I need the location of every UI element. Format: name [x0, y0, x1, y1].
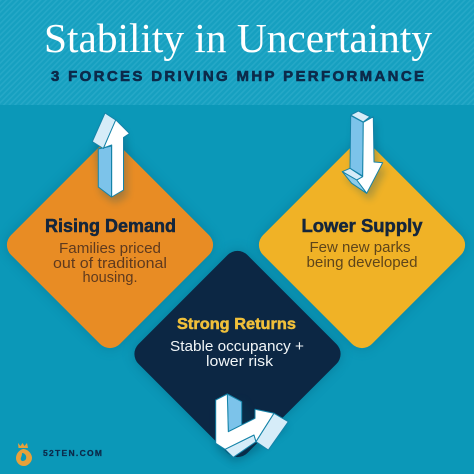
body: rising demand: [53, 240, 167, 286]
title: Stability in Uncertainty: [44, 15, 432, 61]
diamond: orange: [1, 136, 219, 354]
subtitle: 3 FORCES DRIVING MHP PERFORMANCE: [51, 68, 424, 85]
body: lower supply: [306, 239, 418, 271]
header band: [0, 0, 474, 105]
body: rising demand: out of traditional: [53, 255, 167, 272]
logo: [16, 443, 102, 466]
icon: up arrow: [92, 113, 130, 203]
body: lower supply: Few new parks: [310, 239, 410, 256]
heading: rising demand: Rising Demand: [45, 215, 176, 236]
icon: returns arrow: [216, 394, 289, 463]
diamond: yellow: [253, 136, 471, 354]
body: strong returns: Stable occupancy +: [170, 338, 304, 355]
panel: rising demand: [1, 136, 219, 354]
body: strong returns: [170, 338, 304, 370]
panel: lower supply: [253, 136, 471, 354]
heading: strong returns: Strong Returns: [177, 316, 296, 333]
icon: lion: [16, 443, 32, 466]
icon: down arrow: [342, 111, 386, 200]
panel: strong returns: [129, 245, 346, 463]
body: lower supply: being developed: [306, 254, 418, 271]
body: rising demand: housing.: [82, 269, 138, 286]
logo text: 52TEN.COM: [43, 448, 102, 458]
diamond: navy: [129, 245, 346, 463]
heading: lower supply: Lower Supply: [302, 215, 423, 236]
body: strong returns: lower risk: [206, 353, 274, 370]
body: rising demand: Families priced: [59, 240, 161, 257]
